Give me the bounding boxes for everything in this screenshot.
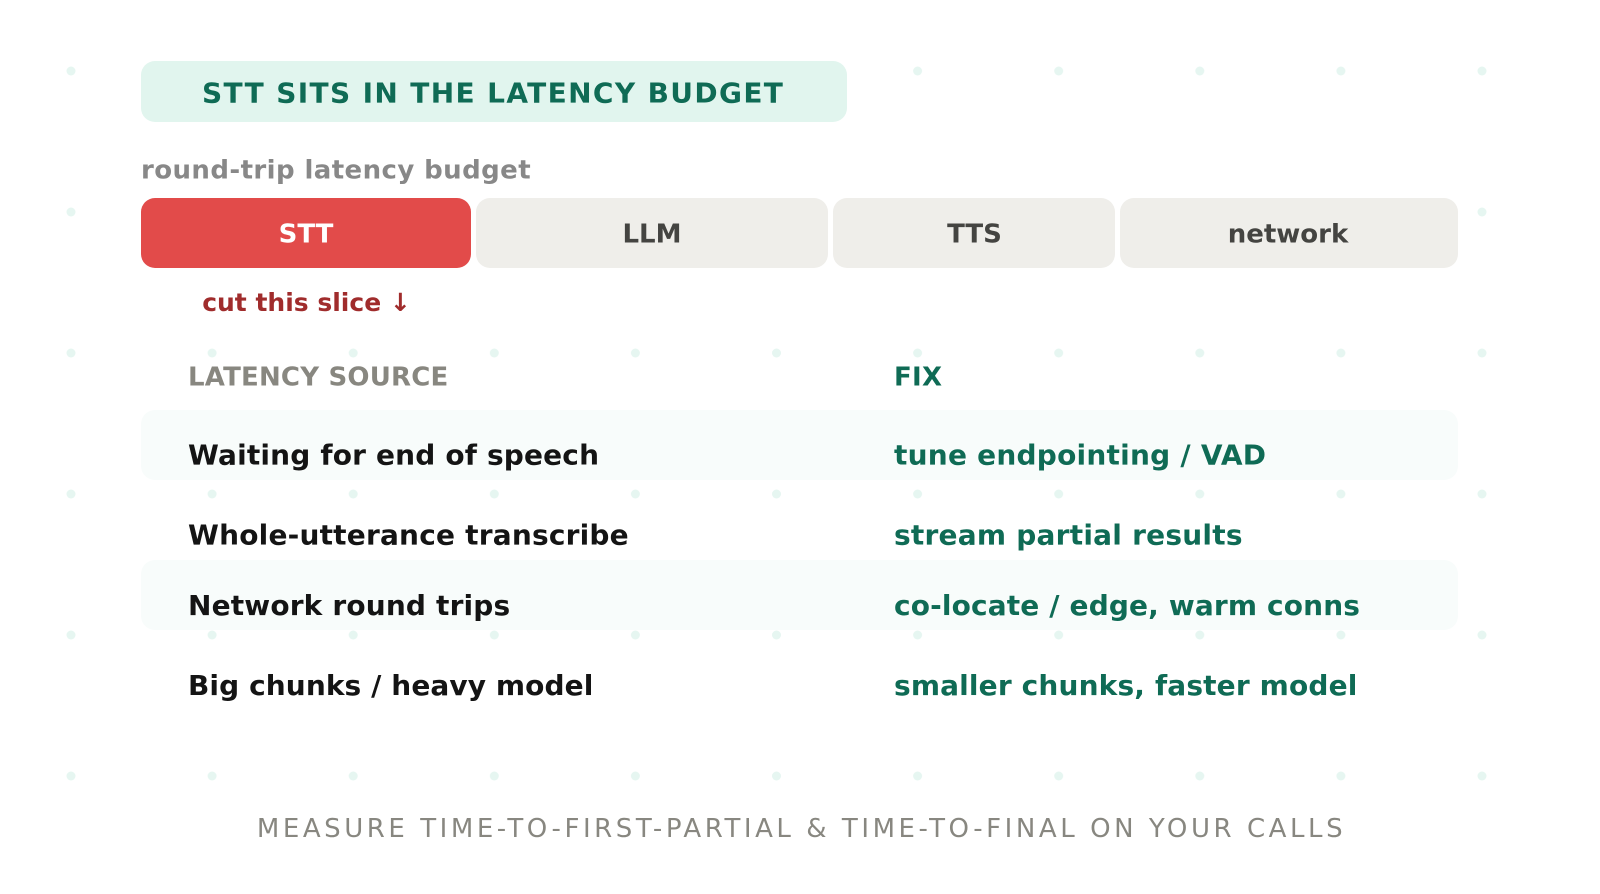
table header [188,362,942,392]
segment: network: network [1228,220,1349,250]
row 1 [141,410,1458,480]
title: STT SITS IN THE LATENCY BUDGET [202,76,784,110]
row 2: Whole-utterance transcribe [188,518,629,552]
table [141,362,1458,702]
row 4: Big chunks / heavy model [188,669,593,702]
footer: MEASURE TIME-TO-FIRST-PARTIAL & TIME-TO-FINAL ON YOUR CALLS [257,814,1346,844]
callout: cut this slice: cut this slice ↓ [202,288,411,317]
latency budget bar [141,198,1458,268]
segment: TTS: TTS [947,220,1002,250]
table header: FIX [894,362,942,392]
row 3 [141,560,1458,630]
segment: network [1120,198,1458,268]
table header: LATENCY SOURCE [188,362,448,392]
row 2 [188,518,1243,552]
segment: STT: STT [279,220,334,250]
row 3: co-locate / edge, warm conns [894,589,1360,622]
row 2: stream partial results [894,518,1243,552]
segment: TTS [833,198,1115,268]
segment: LLM [476,198,828,268]
row 1: tune endpointing / VAD [894,438,1266,472]
segment: LLM: LLM [622,220,682,250]
row 1: Waiting for end of speech [188,438,599,472]
title [141,61,847,122]
row 3: Network round trips [188,589,510,622]
row 4 [188,669,1357,702]
budget label: round-trip latency budget [141,156,531,186]
segment: STT [141,198,471,268]
row 4: smaller chunks, faster model [894,669,1357,702]
